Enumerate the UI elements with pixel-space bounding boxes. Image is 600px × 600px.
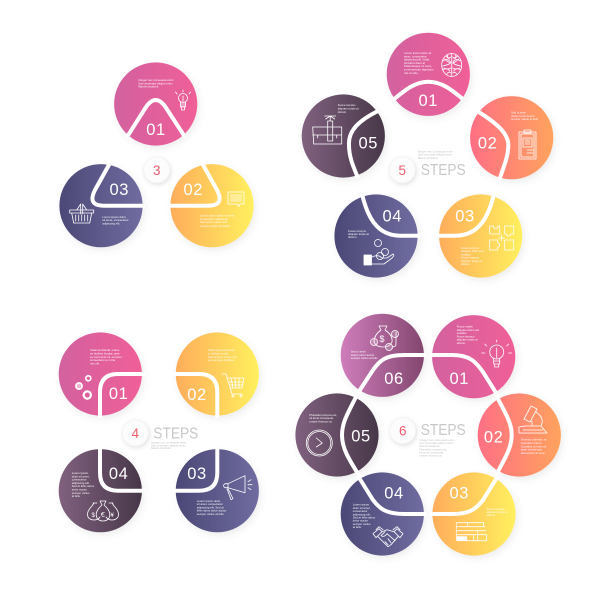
icon: basket bbox=[70, 204, 94, 223]
step 02 circle: Sed tempus varius nisl bbox=[208, 355, 237, 359]
step 05 circle: Phasellus tempus est, bbox=[309, 413, 337, 417]
step 02 circle: in ultricies turpis bbox=[208, 352, 229, 356]
step 02 circle: amet sed tempor bbox=[521, 448, 542, 452]
step 04 circle: consectetur bbox=[353, 509, 367, 513]
step 06 circle bbox=[341, 314, 426, 397]
step 03 circle: adipiscing elit. bbox=[102, 222, 120, 226]
step 04 circle bbox=[341, 472, 426, 556]
step 02 circle: semper varius at felis bbox=[511, 117, 538, 121]
step 03 circle bbox=[430, 472, 516, 556]
caption: 4 steps bbox=[151, 440, 187, 450]
step 03 circle: adipiscing elit. Sed at bbox=[197, 505, 224, 509]
step 01 circle bbox=[59, 332, 145, 418]
step 04 circle: aliquam turpis at bbox=[348, 232, 369, 236]
step 02 circle: 02 bbox=[478, 134, 497, 152]
step 03 circle bbox=[437, 194, 522, 278]
step 03 circle bbox=[173, 447, 259, 532]
step 04 circle: 04 bbox=[384, 484, 404, 502]
step 03 circle: Fusce tempus bbox=[461, 246, 479, 250]
step 04 circle: 04 bbox=[109, 465, 128, 483]
step 02 circle: Sed ut enim bbox=[511, 110, 527, 114]
step 03 circle: sit amet, consectetur bbox=[102, 218, 129, 222]
step 03 circle: sit amet, consectetur bbox=[197, 502, 223, 506]
icon: megaphone bbox=[224, 476, 252, 500]
step 04 circle: dictum. bbox=[348, 235, 357, 239]
step 01 circle: consectetur ex urna bbox=[90, 358, 115, 362]
step 03 circle: felis varius tortor auctor bbox=[197, 509, 226, 513]
caption: 6 steps: sit amet consequat bbox=[419, 450, 443, 454]
step 01 circle: Integer nec consequat enim bbox=[138, 78, 174, 82]
step 02 circle: Nulla quis porta enim bbox=[208, 348, 235, 352]
step 01 circle: nisi ut odio. bbox=[404, 71, 419, 75]
step 06 circle: varius tortor auctor bbox=[351, 353, 374, 357]
step 01 circle: 01 bbox=[146, 121, 166, 139]
step 01 circle: eu facilisis feugiat, ante bbox=[90, 351, 120, 355]
step 02 circle: imperdiet rutrum. bbox=[521, 441, 542, 445]
step 03 circle: Lorem ipsum dolor bbox=[197, 499, 220, 503]
step 04 circle: Lorem ipsum bbox=[72, 471, 89, 475]
step 01 circle: a nisl aenean dignissim bbox=[404, 68, 434, 72]
step 03 circle: aliquam turpis at bbox=[487, 510, 508, 514]
panel: 4 steps bbox=[59, 332, 259, 532]
icon: money bag and coins bbox=[370, 326, 398, 350]
caption: 4 steps: Sed venenatis aliquet enim bbox=[151, 443, 186, 447]
step 01 circle: Pellentesque mi nunc, bbox=[404, 64, 432, 68]
step 01 circle: dictum. bbox=[457, 341, 466, 345]
icon: light bulb with rays bbox=[482, 340, 512, 367]
step 01 circle: nec elit. bbox=[90, 362, 100, 366]
heading: 5 steps: STEPS bbox=[421, 162, 466, 179]
step 05 circle: 05 bbox=[351, 428, 371, 446]
step 01 circle: 01 bbox=[109, 385, 128, 403]
caption: 6 steps: ornare rhoncus at. bbox=[419, 454, 443, 458]
caption: 6 steps: Mauris tincidunt. bbox=[419, 444, 440, 448]
step 05 circle: ornare rhoncus at. bbox=[309, 420, 333, 424]
step 04 circle: tortor auctor bbox=[353, 519, 368, 523]
step 01 circle bbox=[387, 33, 470, 116]
icon: shopping cart bbox=[222, 374, 244, 397]
step 05 circle: sit amet consequat bbox=[309, 416, 333, 420]
step 02 circle bbox=[173, 332, 259, 418]
caption: 5 steps: Mauris tincidunt. bbox=[418, 156, 439, 160]
step 04 circle: semper varius bbox=[72, 491, 90, 495]
step 01 circle: ex commodo mi, sit amet bbox=[90, 355, 122, 359]
caption: 6 steps bbox=[419, 438, 455, 458]
icon: clipboard bbox=[519, 130, 536, 159]
step 02 circle: semper auctor tincidunt bbox=[200, 224, 230, 228]
step 02 circle: 02 bbox=[184, 181, 203, 199]
step 04 circle: adipiscing elit. bbox=[72, 481, 90, 485]
icon: money bags: ¥ bbox=[110, 513, 114, 519]
heading: 6 steps: STEPS bbox=[421, 422, 466, 439]
step 01 circle: sodales bbox=[457, 331, 467, 335]
panel: 5 steps bbox=[302, 33, 553, 278]
step 01 circle: 01 bbox=[419, 92, 438, 110]
icon: briefcase and pencil bbox=[313, 116, 342, 144]
icon: money bags bbox=[88, 501, 118, 521]
step 01 circle: adipiscing elit. Nulla bbox=[404, 58, 430, 62]
icon: money bags: € bbox=[101, 512, 105, 519]
step 02 circle: elementum at nunc. bbox=[521, 451, 546, 455]
step 03 circle: 03 bbox=[455, 208, 475, 226]
step 02 circle bbox=[478, 393, 561, 477]
step 02 circle: Lorem ipsum dolor sit amet bbox=[200, 214, 235, 218]
step 03 circle: dictum. bbox=[487, 513, 496, 517]
step 01 circle: Lorem ipsum dolor sit bbox=[404, 51, 431, 55]
step 06 circle: Sed ut enim bbox=[351, 350, 367, 354]
step 02 circle: sed semper faucibus bbox=[208, 358, 235, 362]
step 04 circle: 04 bbox=[383, 208, 402, 226]
icon: stack of books bbox=[456, 523, 487, 541]
icon: clock bbox=[306, 430, 332, 456]
step 03 circle: Fusce tempus bbox=[487, 507, 505, 511]
badge: 6: 6 bbox=[399, 424, 406, 439]
step 04 circle: adipiscing elit. bbox=[353, 512, 371, 516]
step 04 circle bbox=[334, 194, 420, 278]
step 05 circle bbox=[295, 393, 379, 477]
step 01 circle: Fusce mattis bbox=[457, 324, 473, 328]
icon: money bags: $ bbox=[92, 513, 96, 519]
step 03 circle: sodales bbox=[461, 252, 471, 256]
caption: 4 steps: Mauris tincidunt. bbox=[151, 446, 172, 450]
step 04 circle: at felis. bbox=[353, 525, 362, 529]
icon: light bulb bbox=[176, 90, 190, 110]
step 05 circle: aliquam turpis at bbox=[338, 106, 359, 110]
step 02 circle: Sed ipsum varius nisl bbox=[200, 220, 227, 224]
caption: 5 steps bbox=[418, 150, 453, 160]
step 03 circle: 03 bbox=[110, 181, 129, 199]
step 02 circle: Vivamus pulvinar, ex bbox=[521, 438, 547, 442]
step 02 circle: 02 bbox=[484, 429, 503, 447]
step 03 circle: Fusce tempus bbox=[461, 256, 479, 260]
badge: 3 bbox=[144, 157, 170, 183]
step 04 circle: dolor sit amet, bbox=[353, 506, 371, 510]
step 04 circle: Lorem ipsum bbox=[353, 503, 370, 507]
step 02 circle: varius tortor auctor bbox=[511, 114, 535, 118]
step 04 circle: Fusce tempus bbox=[348, 229, 366, 233]
icon: handshake bbox=[373, 527, 403, 547]
step 03 circle: aliquam dolor sed bbox=[461, 249, 484, 253]
step 03 circle: semper varius at felis. bbox=[197, 512, 225, 516]
step 03 circle: aliquam turpis at bbox=[461, 259, 482, 263]
icon: hand with coins bbox=[364, 240, 394, 265]
step 01 circle: amet, consectetur bbox=[404, 54, 427, 58]
caption: 5 steps: Sed venenatis aliquet enim bbox=[418, 152, 452, 156]
step 03 circle: 03 bbox=[187, 465, 207, 483]
step 04 circle: consectetur bbox=[72, 478, 86, 482]
step 04 circle: Sed at felis varius bbox=[353, 516, 376, 520]
step 03 circle: dictum. bbox=[461, 262, 470, 266]
icon: speech bubble bbox=[228, 192, 244, 206]
step 01 circle: Mauris tincidunt. bbox=[138, 84, 159, 88]
badge: 5: 5 bbox=[399, 163, 406, 178]
step 04 circle: Sed at felis varius bbox=[72, 484, 95, 488]
step 04 circle: dolor sit amet, bbox=[72, 474, 90, 478]
step 02 circle: Curabitur at enim sit bbox=[521, 444, 546, 448]
step 04 circle: semper varius bbox=[353, 522, 371, 526]
step 05 circle: Fusce tempus bbox=[338, 103, 356, 107]
badge: 6 bbox=[390, 418, 416, 444]
step 05 circle: 05 bbox=[359, 134, 378, 152]
step 01 circle: tincidunt dolor at bbox=[404, 61, 425, 65]
step 06 circle: 06 bbox=[384, 370, 404, 388]
icon: brain bbox=[442, 54, 462, 76]
step 01 circle: aliquam turpis at bbox=[457, 338, 478, 342]
step 04 circle bbox=[59, 447, 145, 532]
step 01 circle: aliquam dolor sed bbox=[457, 328, 480, 332]
step 01 circle bbox=[430, 315, 515, 398]
badge: 3: 3 bbox=[153, 163, 160, 178]
icon: money bag and coins: $ bbox=[380, 334, 385, 344]
step 02 circle bbox=[168, 163, 254, 247]
step 01 circle: Vivamus blandit, metus bbox=[90, 348, 120, 352]
icon: gears bbox=[76, 376, 91, 399]
badge: 5 bbox=[389, 157, 415, 183]
step 03 circle: 03 bbox=[450, 484, 469, 502]
step 01 circle: Sed venenatis aliquet enim bbox=[138, 81, 173, 85]
step 03 circle: Lorem ipsum dolor bbox=[102, 215, 126, 219]
step 02 circle: consectetur adipiscing bbox=[200, 217, 229, 221]
caption: 4 steps: Integer nec consequat enim bbox=[151, 440, 187, 444]
caption: 6 steps: Integer nec consequat enim bbox=[419, 438, 455, 442]
step 04 circle: tortor auctor bbox=[72, 488, 87, 492]
badge: 4 bbox=[122, 420, 148, 446]
step 06 circle: semper varius at felis bbox=[351, 356, 378, 360]
panel: 6 steps bbox=[295, 314, 561, 556]
icon: microscope bbox=[519, 406, 547, 433]
step 02 circle: 02 bbox=[187, 386, 207, 404]
badge: 4: 4 bbox=[132, 426, 140, 441]
step 02 circle bbox=[470, 96, 553, 181]
step 01 circle: 01 bbox=[450, 370, 469, 388]
panel: 3 steps bbox=[59, 62, 254, 247]
step 04 circle: at felis. bbox=[72, 494, 81, 498]
caption: 6 steps: Phasellus tempus est, bbox=[419, 447, 447, 451]
caption: 6 steps: Sed venenatis aliquet enim bbox=[419, 441, 454, 445]
step 01 circle bbox=[114, 62, 197, 146]
step 05 circle bbox=[302, 94, 385, 178]
step 01 circle: Fusce tempus bbox=[457, 334, 475, 338]
caption: 5 steps: Integer nec consequat enim bbox=[418, 150, 453, 154]
step 05 circle: dictum. bbox=[338, 110, 347, 114]
heading: 4 steps: STEPS bbox=[153, 425, 198, 442]
icon: puzzle pieces bbox=[490, 226, 514, 250]
step 03 circle bbox=[59, 163, 145, 247]
